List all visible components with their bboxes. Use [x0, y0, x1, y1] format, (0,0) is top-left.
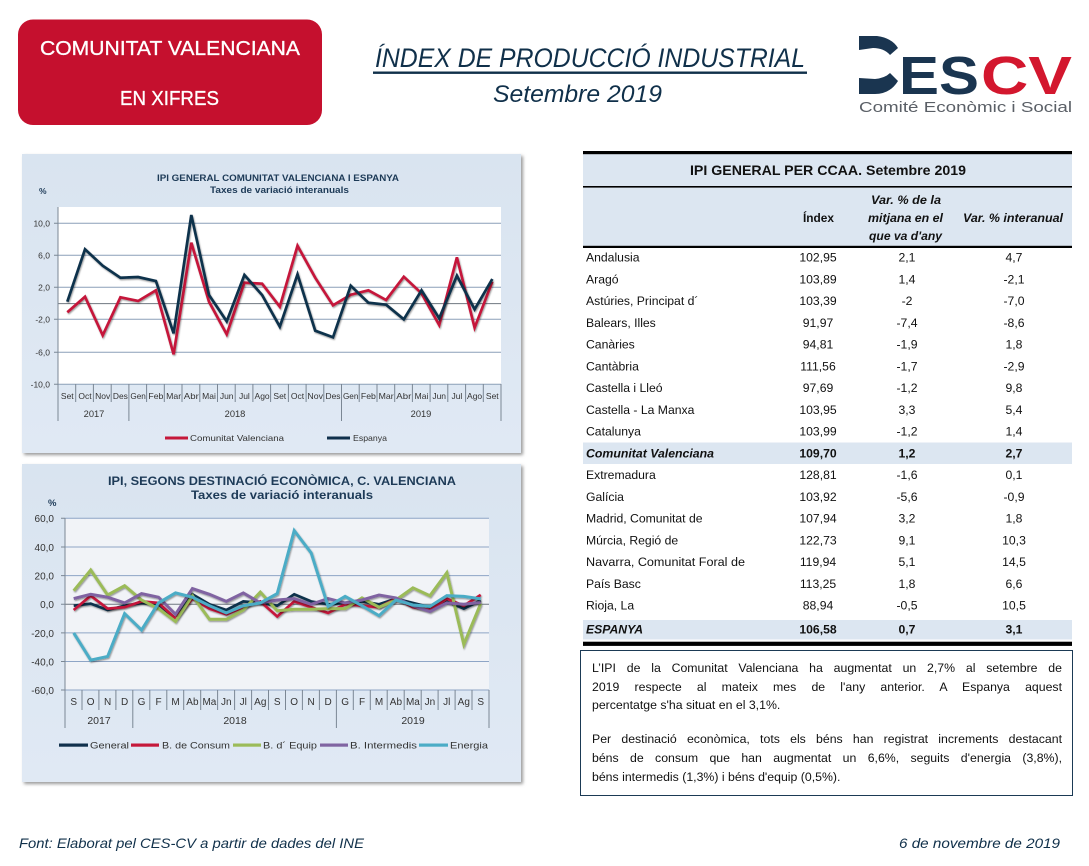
- series: Comunitat Valenciana: [67, 243, 492, 354]
- table rows: Astúries, Principat d´: [586, 294, 698, 308]
- chart title: %: [48, 498, 57, 509]
- column headers: que va d'any: [869, 231, 943, 243]
- series: Béns intermedis: [74, 589, 481, 614]
- chart title: Taxes de variació interanuals: [210, 185, 349, 195]
- x axis labels: D: [121, 697, 128, 708]
- x axis labels: [70, 697, 484, 727]
- x axis labels: 2018: [223, 715, 247, 727]
- table rows: Andalusia: [586, 251, 640, 265]
- footer source: Font: Elaborat pel CES-CV a partir de dades del INE: [19, 835, 365, 851]
- table rows: 0,7: [899, 622, 916, 636]
- x axis labels: Mar: [379, 391, 394, 401]
- table rows: 3,1: [1006, 622, 1023, 636]
- column headers: Índex: [803, 212, 835, 225]
- table rows: 4,7: [1006, 251, 1023, 265]
- table rows: Aragó: [586, 272, 619, 286]
- y axis labels: -60,0: [31, 686, 54, 697]
- table rows: -1,2: [896, 381, 918, 395]
- table rows: Catalunya: [586, 425, 641, 439]
- legend: Espanya: [353, 433, 387, 443]
- table rows: Madrid, Comunitat de: [586, 512, 703, 526]
- table rows: 122,73: [799, 533, 837, 547]
- legend: Energia: [450, 740, 489, 752]
- text box: commentary: percentatge s'ha situat en el 3,1%.: [592, 698, 780, 712]
- table rows: 0,1: [1006, 468, 1023, 482]
- x axis labels: N: [104, 697, 111, 708]
- x axis labels: 2017: [87, 715, 111, 727]
- x axis labels: O: [87, 697, 95, 708]
- x axis labels: Jul: [239, 391, 250, 401]
- table rows: Extremadura: [586, 468, 656, 482]
- x axis labels: Ag: [458, 697, 470, 708]
- header badge: Comunitat Valenciana en xifres: COMUNITAT VALENCIANA: [40, 38, 301, 60]
- table rows: 1,4: [1006, 425, 1023, 439]
- x axis labels: Abr: [184, 391, 199, 401]
- x axis labels: N: [307, 697, 315, 708]
- table title: IPI GENERAL PER CCAA. Setembre 2019: [690, 162, 966, 178]
- table rows: 107,94: [799, 512, 837, 526]
- x axis labels: [61, 391, 499, 419]
- x axis labels: G: [138, 697, 146, 708]
- y axis labels: 60,0: [35, 514, 54, 525]
- y axis labels: -20,0: [31, 629, 54, 640]
- table rows: -1,6: [896, 468, 918, 482]
- x axis labels: F: [359, 697, 365, 708]
- x axis labels: Jul: [451, 391, 462, 401]
- table rows: Comunitat Valenciana: [586, 446, 714, 460]
- table rows: 103,39: [799, 294, 837, 308]
- x axis labels: Gen: [343, 391, 359, 401]
- table rows: Rioja, La: [586, 598, 634, 612]
- text box: commentary: Per destinació econòmica, tots els béns han registrat increments destacant: [592, 732, 1062, 746]
- table rows: -8,6: [1003, 316, 1025, 330]
- chart title: Taxes de variació interanuals: [191, 490, 373, 502]
- x axis labels: Ma: [202, 697, 217, 708]
- chart title: %: [39, 186, 47, 196]
- table rows: Castella i Lleó: [586, 381, 663, 395]
- x axis labels: M: [375, 697, 383, 708]
- logo: CES CV: Comité Econòmic i Social: [859, 99, 1072, 116]
- table rows: Balears, Illes: [586, 316, 656, 330]
- table rows: ESPANYA: [586, 622, 643, 636]
- legend: B. de Consum: [162, 740, 230, 752]
- panel: IPI by economic destination line chart: [22, 464, 523, 784]
- x axis labels: 2018: [225, 409, 245, 419]
- table rows: 6,6: [1006, 577, 1023, 591]
- x axis labels: Ag: [254, 697, 266, 708]
- y axis labels: 0,0: [40, 600, 54, 611]
- table rows: 10,5: [1002, 598, 1026, 612]
- x axis labels: Des: [326, 391, 340, 401]
- x axis labels: M: [171, 697, 180, 708]
- text box: commentary: L’IPI de la Comunitat Valenciana ha augmentat un 2,7% al setembre de: [592, 661, 1062, 675]
- y axis labels: -10,0: [31, 380, 50, 390]
- table rows: 103,99: [799, 425, 837, 439]
- panel: IPI general line chart: [22, 154, 523, 455]
- table rows: 97,69: [803, 381, 833, 395]
- x axis labels: Mai: [415, 391, 428, 401]
- table rows: 103,89: [799, 272, 837, 286]
- series: Béns de consum: [74, 595, 481, 619]
- y axis labels: -40,0: [31, 658, 54, 668]
- table rows: 1,8: [899, 577, 916, 591]
- table rows: [586, 251, 1026, 636]
- x axis labels: S: [274, 697, 281, 708]
- table rows: -1,7: [896, 359, 918, 373]
- x axis labels: Abr: [396, 391, 411, 401]
- x axis labels: Gen: [130, 391, 146, 401]
- x axis labels: Mai: [202, 391, 216, 401]
- table rows: 103,95: [799, 403, 837, 417]
- x axis labels: Oct: [78, 391, 92, 401]
- table rows: 3,3: [899, 403, 916, 417]
- table rows: 1,8: [1006, 512, 1023, 526]
- table rows: 94,81: [803, 338, 833, 352]
- logo: CES CV: [859, 36, 1072, 116]
- x axis labels: Ago: [255, 391, 270, 401]
- x axis labels: Ab: [390, 697, 402, 708]
- logo: CES CV: ES: [899, 46, 979, 106]
- text box: commentary: béns de consum que han augmentat un 6,6%, seguits d'energia (3,8%),: [592, 751, 1062, 765]
- series: Espanya: [67, 215, 492, 337]
- header badge: Comunitat Valenciana en xifres: EN XIFRES: [120, 88, 219, 110]
- table rows: 1,2: [899, 446, 916, 460]
- table rows: 5,4: [1006, 403, 1023, 417]
- table rows: 1,4: [899, 272, 916, 286]
- y axis labels: [31, 514, 54, 697]
- table rows: 113,25: [800, 577, 836, 591]
- x axis labels: 2017: [84, 409, 104, 419]
- table rows: Cantàbria: [586, 359, 639, 373]
- table rows: 102,95: [799, 251, 837, 265]
- legend: [59, 740, 489, 752]
- column headers: Var. % de la: [871, 195, 942, 207]
- legend: Comunitat Valenciana: [190, 433, 284, 443]
- title: ÍNDEX DE PRODUCCIÓ INDUSTRIAL: [375, 42, 805, 73]
- y axis labels: 20,0: [35, 572, 54, 582]
- x axis labels: Feb: [148, 391, 164, 401]
- y axis labels: 2,0: [38, 282, 50, 292]
- legend: General: [90, 740, 129, 752]
- x axis labels: S: [477, 697, 484, 708]
- table rows: -0,9: [1003, 490, 1025, 504]
- legend: B. d´ Equip: [263, 740, 317, 752]
- x axis labels: Jl: [443, 697, 450, 708]
- table rows: 109,70: [799, 446, 837, 460]
- y axis labels: [31, 218, 50, 390]
- x axis labels: Feb: [361, 391, 376, 401]
- y axis labels: -6,0: [35, 348, 50, 358]
- table rows: 111,56: [800, 359, 836, 373]
- legend: [165, 433, 387, 443]
- y axis labels: 10,0: [33, 218, 50, 228]
- table rows: 91,97: [803, 316, 833, 330]
- x axis labels: Set: [486, 391, 499, 401]
- table rows: Castella - La Manxa: [586, 403, 695, 417]
- title: [373, 42, 807, 108]
- table: IPI general per CCAA: [583, 151, 1072, 646]
- table rows: 106,58: [799, 622, 837, 636]
- x axis labels: Jn: [425, 697, 435, 708]
- x axis labels: O: [290, 697, 298, 708]
- table rows: Múrcia, Regió de: [586, 533, 678, 547]
- table rows: 2,1: [899, 251, 916, 265]
- table rows: 88,94: [803, 598, 833, 612]
- title: Setembre 2019: [493, 81, 662, 108]
- column headers: mitjana en el: [868, 213, 944, 225]
- x axis labels: Ab: [186, 697, 199, 708]
- x axis labels: Set: [61, 391, 74, 401]
- chart title: IPI GENERAL COMUNITAT VALENCIANA I ESPANYA: [157, 173, 400, 183]
- table rows: -1,2: [896, 425, 918, 439]
- table rows: Navarra, Comunitat Foral de: [586, 555, 745, 569]
- x axis labels: Ma: [406, 697, 420, 708]
- table rows: -0,5: [896, 598, 918, 612]
- x axis labels: Jun: [220, 391, 234, 401]
- table rows: 5,1: [899, 555, 916, 569]
- legend: B. Intermedis: [350, 740, 417, 752]
- table rows: País Basc: [586, 577, 641, 591]
- x axis labels: Oct: [291, 391, 305, 401]
- text box: commentary: 2019 respecte al mateix mes de l'any anterior. A Espanya aquest: [592, 680, 1062, 694]
- series: General: [74, 594, 481, 619]
- y axis labels: -2,0: [35, 314, 50, 324]
- header badge: Comunitat Valenciana en xifres: [18, 20, 322, 125]
- table rows: -2,9: [1003, 359, 1025, 373]
- table rows: 128,81: [799, 468, 837, 482]
- x axis labels: F: [155, 697, 162, 708]
- table rows: -5,6: [896, 490, 918, 504]
- series: Energia: [74, 531, 481, 660]
- table rows: 2,7: [1006, 446, 1023, 460]
- table rows: 14,5: [1002, 555, 1026, 569]
- table rows: 119,94: [800, 555, 836, 569]
- table rows: -1,9: [896, 338, 918, 352]
- x axis labels: Des: [113, 391, 128, 401]
- text box: commentary: béns intermedis (1,3%) i béns d'equip (0,5%).: [592, 770, 840, 784]
- table rows: 3,2: [899, 512, 916, 526]
- table rows: -2,1: [1003, 272, 1025, 286]
- x axis labels: D: [324, 697, 332, 708]
- table rows: -7,0: [1003, 294, 1025, 308]
- x axis labels: Nov: [95, 391, 111, 401]
- x axis labels: S: [70, 697, 77, 708]
- y axis labels: 6,0: [38, 250, 50, 260]
- table rows: 1,8: [1006, 338, 1023, 352]
- x axis labels: 2019: [411, 409, 431, 419]
- table rows: 103,92: [799, 490, 837, 504]
- table rows: Galícia: [586, 490, 624, 504]
- logo: CES CV: CV: [981, 46, 1072, 106]
- table rows: -2: [902, 294, 913, 308]
- x axis labels: Set: [273, 391, 287, 401]
- x axis labels: Jn: [221, 697, 232, 708]
- x axis labels: Nov: [307, 391, 324, 401]
- x axis labels: G: [341, 697, 349, 708]
- table rows: 9,8: [1006, 381, 1023, 395]
- series: Béns d'equip: [74, 570, 481, 644]
- column headers: [803, 195, 1064, 243]
- y axis labels: 40,0: [35, 543, 54, 554]
- x axis labels: Ago: [467, 391, 482, 401]
- table rows: -7,4: [896, 316, 918, 330]
- text box: commentary: [580, 650, 1073, 796]
- table rows: Canàries: [586, 338, 635, 352]
- table rows: 9,1: [899, 533, 916, 547]
- x axis labels: Jun: [432, 391, 446, 401]
- x axis labels: Jl: [240, 697, 247, 708]
- chart title: [48, 475, 456, 509]
- table rows: 10,3: [1002, 533, 1026, 547]
- chart title: IPI, SEGONS DESTINACIÓ ECONÒMICA, C. VALENCIANA: [108, 475, 456, 488]
- column headers: Var. % interanual: [963, 213, 1064, 225]
- footer date: 6 de novembre de 2019: [899, 835, 1060, 851]
- x axis labels: 2019: [401, 715, 425, 727]
- x axis labels: Mar: [166, 391, 181, 401]
- chart title: [39, 173, 400, 196]
